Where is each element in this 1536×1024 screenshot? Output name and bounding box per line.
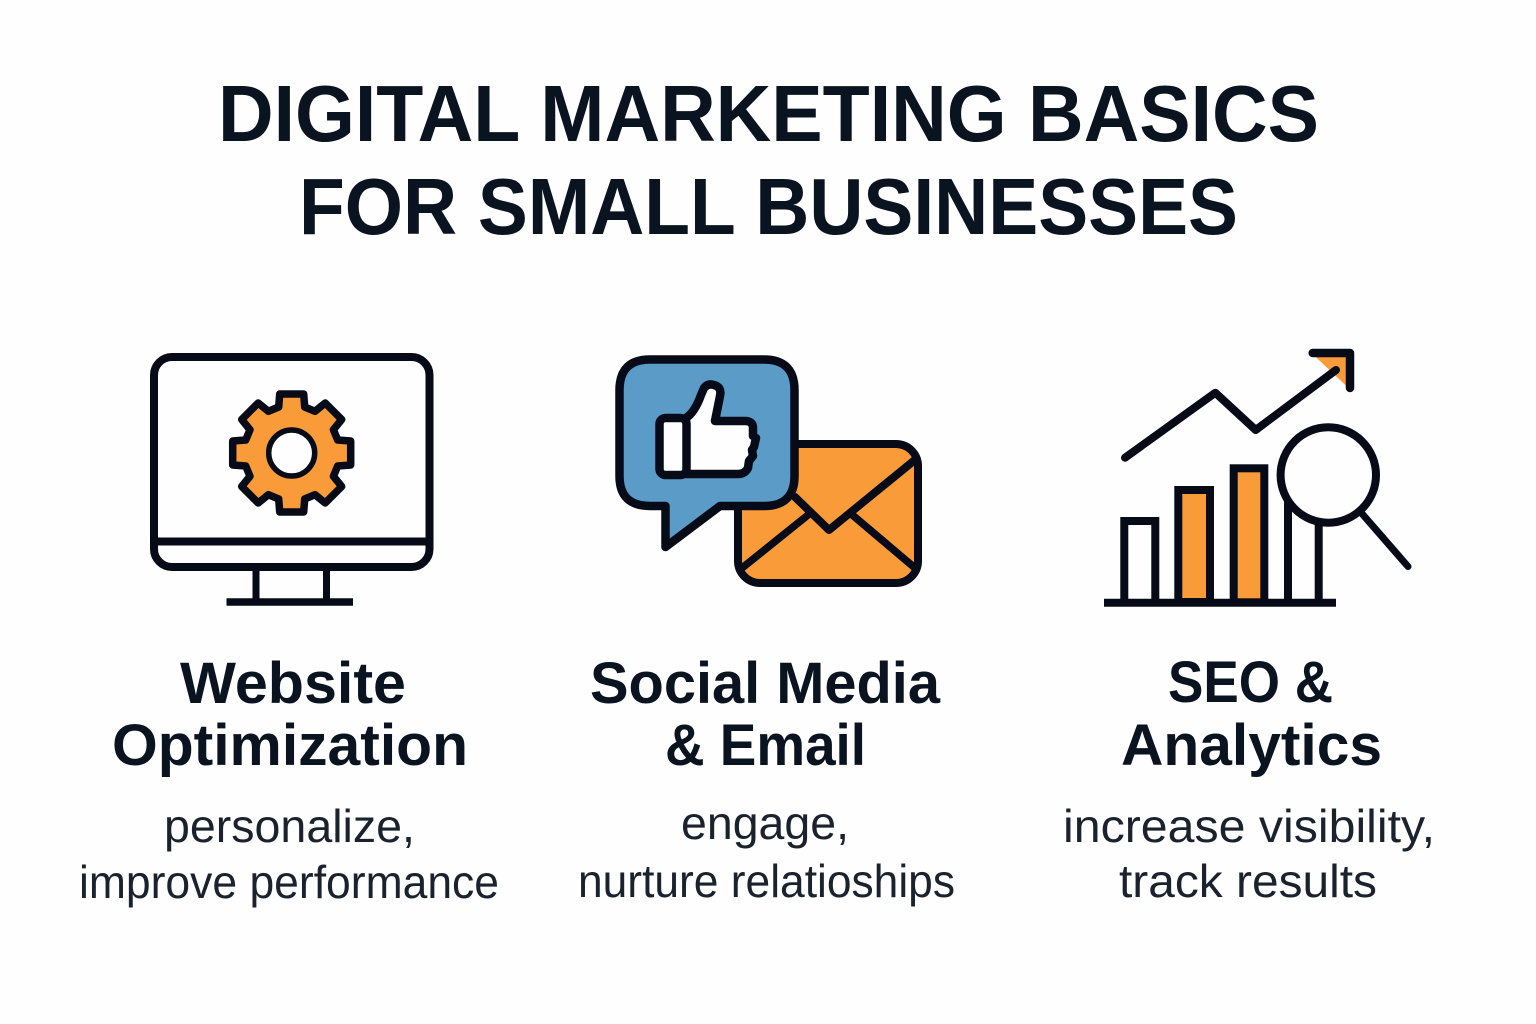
heading: social media and email: & Email — [665, 713, 866, 778]
heading: website optimization: Website — [180, 651, 406, 716]
title: FOR SMALL BUSINESSES — [299, 162, 1238, 251]
heading: website optimization: Optimization — [112, 713, 468, 778]
description: website optimization — [79, 800, 499, 908]
heading: social media and email — [590, 651, 941, 778]
icon: monitor with gear — [154, 357, 430, 602]
icon: speech bubble with thumbs up — [620, 360, 794, 547]
title: DIGITAL MARKETING BASICS — [218, 69, 1319, 158]
magnifier — [1281, 427, 1408, 566]
description: social media and email: nurture relatioships — [578, 855, 955, 907]
title — [218, 69, 1319, 251]
icon: bar chart with trend arrow and magnifier — [1104, 353, 1408, 603]
description: social media and email: engage, — [681, 797, 849, 849]
panel: website optimization — [79, 357, 499, 908]
heading: social media and email: Social Media — [590, 651, 941, 716]
description: seo and analytics — [1063, 800, 1435, 907]
heading: seo and analytics: Analytics — [1121, 713, 1382, 778]
panel: social media and email — [578, 360, 955, 907]
trend line — [1125, 370, 1336, 458]
heading: seo and analytics — [1121, 650, 1382, 778]
panel: seo and analytics — [1063, 353, 1435, 907]
heading: website optimization — [112, 651, 468, 778]
heading: seo and analytics: SEO & — [1168, 650, 1333, 715]
bars — [1104, 468, 1336, 603]
description: seo and analytics: track results — [1119, 855, 1377, 907]
description: seo and analytics: increase visibility, — [1063, 800, 1435, 852]
description: social media and email — [578, 797, 955, 907]
description: website optimization: improve performance — [79, 856, 499, 908]
arrowhead — [1313, 353, 1350, 388]
icon: envelope — [738, 444, 918, 583]
description: website optimization: personalize, — [164, 800, 415, 852]
